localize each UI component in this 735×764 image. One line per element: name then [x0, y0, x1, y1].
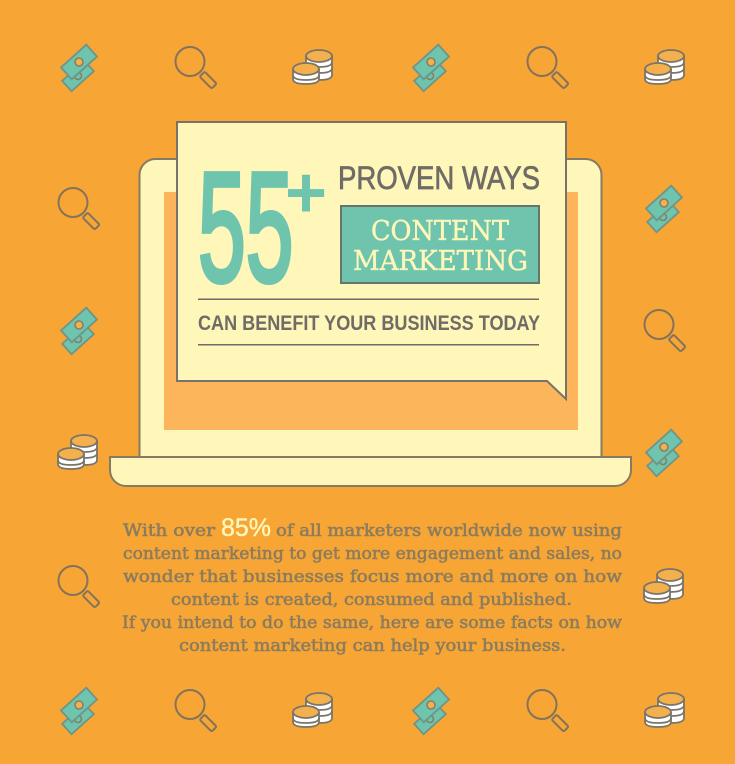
speech bubble title panel [177, 122, 566, 399]
intro paragraph: If you intend to do the same, here are some facts on how [122, 613, 622, 633]
teal content marketing box [341, 206, 539, 283]
icon: coins top row 1 [293, 50, 332, 84]
plus sign: + [285, 153, 327, 233]
subheading: CAN BENEFIT YOUR BUSINESS TODAY [198, 312, 540, 335]
icon: magnifier bottom row 1 [176, 690, 217, 732]
icon: coins bottom row 1 [293, 693, 332, 727]
icon: magnifier left 1 [58, 188, 100, 230]
icon: magnifier left 2 [58, 566, 100, 608]
icon: money right 1 [646, 186, 682, 232]
icon: magnifier top row 1 [176, 47, 217, 89]
teal content marketing box: CONTENT [371, 216, 509, 247]
icon: magnifier bottom row 2 [528, 690, 569, 732]
icon: money top row 1 [61, 45, 97, 91]
intro paragraph: content marketing can help your business. [179, 636, 566, 656]
icon: money right 2 [646, 430, 682, 476]
icon: money bottom row 1 [61, 688, 97, 734]
icon: money left [61, 308, 97, 354]
icon: coins left 1 [58, 435, 97, 469]
teal content marketing box: MARKETING [353, 246, 528, 277]
laptop screen [140, 159, 602, 457]
intro paragraph: of all marketers worldwide now using [276, 521, 622, 541]
icon: coins bottom row 2 [645, 693, 684, 727]
big number 55: 55 [198, 140, 293, 314]
intro paragraph: With over [123, 521, 216, 541]
intro paragraph: wonder that businesses focus more and more on how [123, 567, 622, 587]
icon: coins top row 2 [645, 50, 684, 84]
laptop illustration [110, 159, 631, 486]
laptop inner display [164, 192, 578, 430]
highlighted 85%: 85% [221, 514, 271, 542]
icon: coins right [644, 569, 683, 603]
icon: money top row 2 [413, 45, 449, 91]
laptop base [110, 457, 631, 486]
bubble shape [177, 122, 566, 399]
intro paragraph: content marketing to get more engagement and sales, no [123, 544, 622, 564]
icon: magnifier top row 2 [528, 47, 569, 89]
icon: magnifier right [644, 310, 686, 352]
intro paragraph [122, 514, 622, 656]
intro paragraph: content is created, consumed and published. [171, 590, 572, 610]
heading: proven ways: PROVEN WAYS [338, 160, 540, 196]
icon: money bottom row 2 [413, 688, 449, 734]
